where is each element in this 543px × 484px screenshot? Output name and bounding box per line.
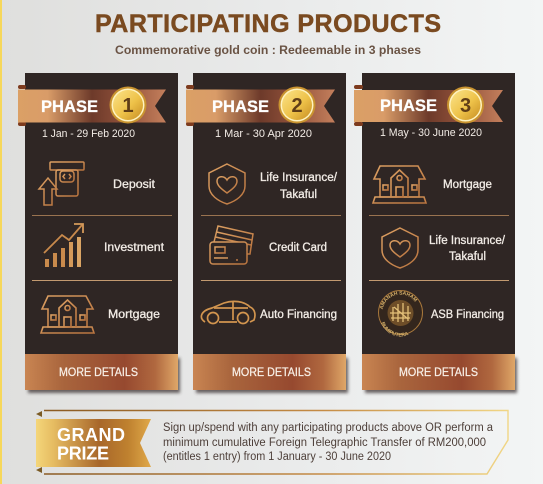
phase 3 coin bbox=[447, 86, 484, 124]
label: life insurance bbox=[260, 172, 338, 201]
panel 2 body bbox=[193, 73, 346, 355]
label: ASB financing: ASB Financing bbox=[431, 309, 504, 321]
label: life insurance: Life Insurance/ bbox=[429, 235, 506, 247]
prize ribbon: GRAND bbox=[57, 425, 125, 445]
label: life insurance: Takaful bbox=[280, 189, 317, 201]
more details button bbox=[193, 354, 346, 390]
panel: grand prize bbox=[36, 410, 508, 474]
icon: ASB seal bbox=[378, 290, 423, 337]
panel: phase 2 bbox=[186, 73, 348, 393]
label: mortgage: Mortgage bbox=[443, 179, 492, 191]
more details button: MORE DETAILS bbox=[399, 367, 478, 379]
label: life insurance bbox=[429, 235, 506, 263]
divider bbox=[201, 280, 341, 281]
more details button: MORE DETAILS bbox=[59, 367, 138, 379]
icon: mortgage house bbox=[373, 166, 426, 203]
left gold edge bbox=[0, 0, 2, 484]
icon: car bbox=[201, 301, 255, 324]
phase 2 ribbon bbox=[186, 85, 335, 126]
prize terms text bbox=[163, 422, 494, 463]
prize frame bbox=[44, 410, 508, 474]
title: PARTICIPATING PRODUCTS bbox=[95, 10, 441, 38]
label: deposit: Deposit bbox=[113, 179, 156, 191]
more details button bbox=[25, 354, 178, 390]
phase 1 ribbon: PHASE bbox=[41, 98, 98, 116]
phase 1 dates: 1 Jan - 29 Feb 2020 bbox=[42, 128, 135, 140]
divider bbox=[32, 280, 172, 281]
icon: life insurance shield bbox=[209, 164, 245, 204]
phase 2 ribbon: PHASE bbox=[212, 98, 269, 116]
more details button: MORE DETAILS bbox=[232, 367, 311, 379]
phase 2 dates: 1 Mar - 30 Apr 2020 bbox=[215, 128, 312, 140]
panel: phase 1 bbox=[18, 73, 180, 393]
phase 3 ribbon bbox=[354, 85, 503, 126]
panel 3 body bbox=[362, 73, 515, 355]
label: credit card: Credit Card bbox=[269, 242, 327, 254]
icon: credit card bbox=[210, 226, 253, 264]
phase 2 coin: 2 bbox=[291, 95, 303, 117]
icon: mortgage house bbox=[41, 296, 94, 333]
panel 1 body bbox=[25, 73, 178, 355]
more details button bbox=[362, 354, 515, 390]
divider bbox=[369, 280, 509, 281]
label: auto financing: Auto Financing bbox=[260, 309, 337, 321]
icon: ASB seal: AMANAH SAHAM bbox=[380, 291, 418, 310]
panel: phase 3 bbox=[354, 73, 520, 396]
phase 3 ribbon: PHASE bbox=[380, 97, 437, 115]
subtitle: Commemorative gold coin : Redeemable in 3 phases bbox=[115, 43, 421, 57]
divider bbox=[32, 215, 172, 216]
phase 2 coin bbox=[278, 86, 316, 124]
divider bbox=[201, 215, 341, 216]
label: life insurance: Life Insurance/ bbox=[260, 172, 338, 184]
divider bbox=[369, 215, 509, 216]
prize terms text: (entitles 1 entry) from 1 January - 30 June 2020 bbox=[163, 451, 391, 463]
phase 1 coin bbox=[110, 86, 146, 124]
phase 3 dates: 1 May - 30 June 2020 bbox=[380, 127, 482, 139]
prize ribbon: PRIZE bbox=[57, 444, 109, 464]
prize terms text: Sign up/spend with any participating products above OR perform a bbox=[163, 422, 494, 434]
label: life insurance: Takaful bbox=[449, 251, 486, 263]
phase 1 ribbon bbox=[18, 85, 166, 126]
prize terms text: minimum cumulative Foreign Telegraphic Transfer of RM200,000 bbox=[163, 437, 486, 449]
icon: investment chart bbox=[44, 224, 83, 267]
icon: deposit ATM bbox=[39, 162, 84, 205]
icon: life insurance shield bbox=[382, 228, 418, 268]
icon: ASB seal: BUMIPUTERA bbox=[381, 322, 408, 337]
prize ribbon bbox=[36, 411, 151, 473]
phase 3 coin: 3 bbox=[460, 95, 471, 117]
label: mortgage: Mortgage bbox=[108, 309, 160, 321]
label: investment: Investment bbox=[104, 242, 165, 254]
phase 1 coin: 1 bbox=[122, 95, 134, 117]
